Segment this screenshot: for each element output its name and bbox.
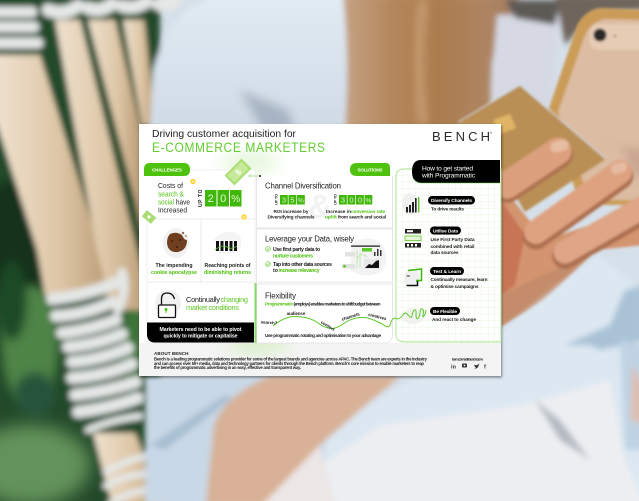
stat: up to 300%: UP TO: [334, 194, 338, 205]
stat: up to 20%: 2: [208, 193, 214, 205]
stat: up to 35%: UP TO: [274, 194, 278, 205]
text: conversion uplift: Increase in: [326, 209, 351, 215]
callout: pivot message: Marketers need to be able to pivot: [160, 327, 242, 333]
coin icons: [191, 180, 246, 219]
small banknote icon: [142, 210, 156, 224]
banknote icon: $: [234, 167, 243, 177]
curve labels: search?: [261, 319, 278, 326]
text: flexibility intro: Programmatic: [265, 302, 293, 306]
banknote icon: [225, 159, 251, 185]
text: costs increased: search &: [158, 192, 184, 198]
text: roi increase: [268, 209, 315, 220]
footer: about bench: the benefits of programmatic advertising in an easy, effective and transparent way.: [154, 365, 301, 370]
text: costs increased: have: [176, 200, 190, 206]
checklist: first party data: increase relevancy: [278, 268, 320, 274]
text: costs increased: Costs of: [158, 183, 183, 190]
white fabric: [320, 380, 639, 501]
connector dot: [249, 175, 261, 177]
stat: up to 300%: 3: [341, 196, 345, 205]
text: diminishing returns: diminishing returns: [204, 270, 251, 276]
heading: channel diversification: Channel Diversification: [265, 182, 341, 190]
icon: open padlock: [155, 290, 181, 318]
green glow accents: [220, 152, 290, 352]
text: conversion uplift: [325, 209, 386, 220]
text: costs increased: Increased: [158, 208, 187, 214]
panel: solutions: [249, 163, 431, 343]
title: [152, 129, 325, 155]
shirt: [150, 0, 350, 130]
step: be flexible: [396, 307, 476, 324]
curve labels: audience: [287, 311, 306, 316]
white rope wraps: [0, 0, 176, 501]
phone: [549, 8, 639, 205]
ampersand watermark: &: [308, 188, 332, 226]
heading pill: [412, 160, 500, 183]
stat: up to 300%: 0: [349, 196, 353, 205]
text: changing market conditions: [186, 295, 248, 312]
footer: contact and social icons: [451, 358, 486, 370]
text: changing market conditions: changing: [220, 295, 248, 304]
stat: up to 20%: [198, 189, 242, 207]
text: conversion uplift: from search and social: [338, 214, 386, 220]
step: diversify channels: [402, 193, 475, 215]
solutions pill: SOLUTIONS: [358, 168, 382, 172]
checklist: first party data: Tap into other data sources: [273, 262, 332, 268]
step: utilise data: [405, 226, 475, 256]
step: utilise data: data sources: [430, 250, 459, 256]
callout: pivot message: [147, 322, 254, 342]
footer: about bench: and can access over 50+ media, data and technology partners for clients through the Bench platform. Bench's core mission to enable marketers to reap: [154, 361, 424, 366]
challenges pill: CHALLENGES: [152, 168, 182, 172]
footer: contact and social icons: team@mediabench.com: [452, 358, 484, 362]
text: cookie apocalypse: cookie apocalypse: [151, 270, 197, 276]
checklist: first party data: to: [273, 268, 278, 274]
callout: pivot message: quickly to mitigate or capitalise: [164, 334, 238, 340]
heading: leverage your data: Leverage your Data, wisely: [265, 234, 354, 244]
challenges pill: [144, 163, 190, 176]
icon: cookie: [163, 228, 189, 258]
heading: flexibility: Flexibility: [265, 292, 296, 300]
text: diminishing returns: [204, 263, 251, 276]
solutions pill: [350, 163, 390, 176]
footer: about bench: ABOUT BENCH: [154, 351, 189, 356]
curve labels: context: [320, 320, 336, 332]
heading pill: How to get started: [422, 166, 473, 172]
solutions panel outlines: [256, 176, 392, 228]
step: utilise data: combined with retail: [430, 244, 474, 250]
stat: up to 35%: [274, 194, 305, 205]
step: be flexible: And react to change: [432, 317, 476, 323]
title: E-COMMERCE MARKETERS: [152, 139, 325, 155]
text: roi increase: ROI increase by: [274, 209, 309, 215]
footer: contact and social icons: f: [484, 364, 486, 370]
text: costs increased: [158, 183, 190, 214]
curve labels: channels: [341, 311, 361, 322]
hair: [343, 0, 520, 130]
curve: flexible journey line: [273, 309, 431, 329]
icon: diminishing returns bars: [214, 232, 241, 254]
checklist: first party data: Use first party data to: [273, 247, 320, 253]
challenges panel outline: [147, 170, 255, 343]
title: Driving customer acquisition for: [152, 129, 297, 140]
text: diminishing returns: Reaching points of: [204, 263, 251, 269]
text: cookie apocalypse: [151, 263, 197, 276]
text: costs increased: social: [158, 200, 174, 206]
stat: up to 20%: 0: [220, 193, 226, 205]
text: changing market conditions: market conditions: [186, 303, 239, 312]
stat: up to 20%: %: [231, 194, 240, 205]
panel: challenges: [142, 159, 255, 343]
stat: up to 35%: 5: [290, 196, 294, 205]
stat: up to 20%: UP TO: [198, 189, 204, 207]
text: changing market conditions: Continually: [186, 295, 220, 304]
gold card: [458, 85, 606, 212]
grid panel: [396, 169, 501, 342]
text: conversion uplift: uplift: [325, 214, 337, 220]
step: test and learn: Continually measure, learn: [430, 277, 488, 283]
footer: contact and social icons: in: [451, 364, 457, 370]
stat: up to 300%: 0: [358, 196, 362, 205]
text: conversion uplift: conversion rate: [351, 209, 385, 215]
step: test and learn: [404, 267, 488, 290]
footer: about bench: Bench is a leading programmatic solutions provider for some of the largest brands and agencies across APAC. The Bench team are experts in the industry: [154, 356, 428, 362]
step: diversify channels: To drive results: [431, 206, 464, 212]
dashboard illustration: [342, 239, 386, 276]
hammock poles: [0, 20, 165, 501]
stat: up to 35%: 3: [282, 196, 286, 205]
curve labels: [261, 311, 388, 332]
lower right shirt: [320, 255, 639, 501]
step: utilise data: Use First Party Data: [430, 237, 475, 243]
step: test and learn: & optimise campaigns: [430, 284, 479, 290]
leg: [145, 376, 325, 501]
curve labels: creatives: [368, 312, 388, 321]
stat: up to 35%: %: [298, 198, 304, 204]
step: be flexible: Be Flexible: [433, 309, 457, 315]
step: utilise data: Utilise Data: [433, 228, 458, 234]
text: roi increase: Diversifying channels: [268, 214, 315, 220]
step: diversify channels: Diversify Channels: [431, 198, 472, 204]
hand: [501, 185, 639, 327]
heading pill: with Programmatic: [421, 172, 476, 180]
stat: up to 300%: %: [366, 198, 372, 204]
panel: how to get started: [396, 160, 501, 342]
text: flexibility intro: (employs) enables marketers to shift budget between: [294, 302, 381, 306]
shirt behind hair: [491, 15, 560, 120]
step: test and learn: Test & Learn: [433, 269, 461, 275]
checklist: first party data: [266, 247, 332, 274]
foliage: [0, 0, 160, 501]
checklist: first party data: nurture customers: [273, 254, 313, 260]
infographic card: [139, 124, 501, 376]
logo: BENCH: ®: [490, 131, 493, 135]
text: flexibility conclusion: Use programmatic rotating and optimisation to your advantage: [265, 333, 381, 338]
footer background: [139, 343, 501, 376]
text: cookie apocalypse: The impending: [156, 263, 192, 269]
footer: about bench: [154, 351, 428, 370]
logo: BENCH: BENCH: [432, 129, 490, 144]
stat: up to 300%: [334, 194, 372, 205]
